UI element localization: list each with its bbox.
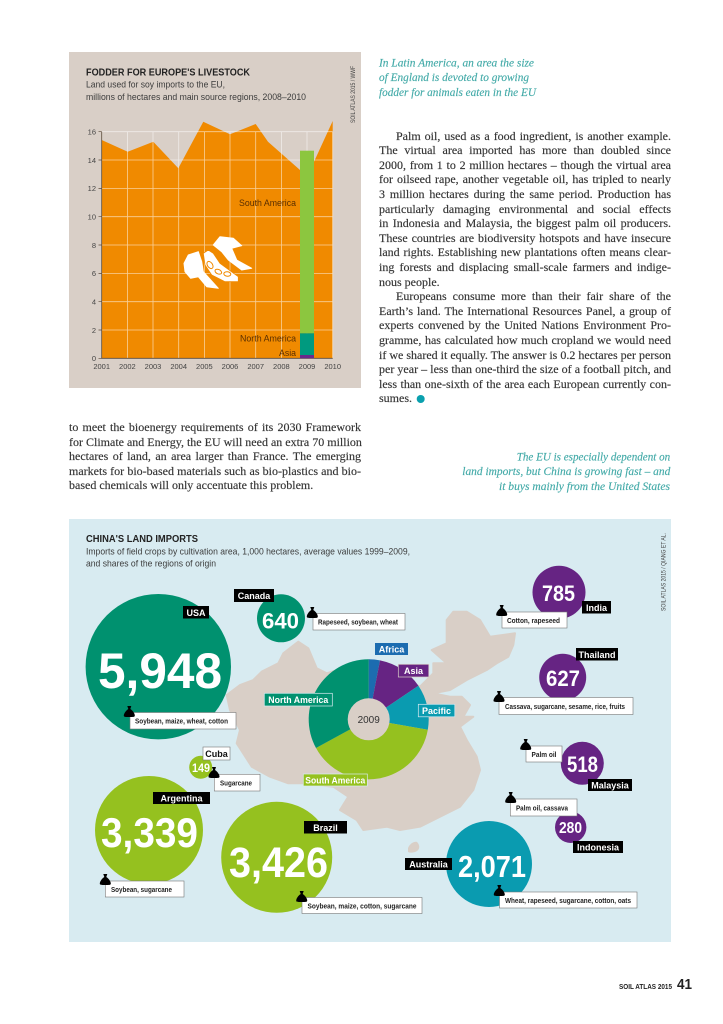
y axis labels: 8 [92, 241, 96, 250]
country: Thailand: 627 [546, 666, 580, 691]
country: Cuba [189, 747, 260, 791]
text block: palm oil and fair share: ing forests and displacing small-scale farmers and indige- [379, 260, 671, 274]
country: Canada: Canada [238, 591, 271, 601]
region labels: South America [239, 198, 297, 209]
caption: Latin America [378, 58, 537, 99]
text block: bioenergy requirements: markets for bio-based materials such as bio-plastics and bio- [69, 464, 361, 478]
donut chart: shares of regions 2009: 2009 [358, 715, 380, 726]
donut labels: South America [305, 776, 366, 786]
donut labels: Pacific [422, 706, 451, 716]
region labels: North America [240, 334, 297, 344]
country: USA: Soybean, maize, wheat, cotton [135, 716, 228, 726]
text block: bioenergy requirements: to meet the bioenergy requirements of its 2030 Framework [69, 420, 361, 434]
text block: bioenergy requirements: based chemicals will only accentuate this problem. [69, 478, 313, 492]
country: Malaysia: 518 [567, 752, 598, 777]
country: Malaysia [520, 739, 632, 791]
donut labels: Asia [404, 666, 424, 676]
text block: palm oil and fair share: gramme, has calculated how much cropland we would need [379, 333, 671, 347]
text block: palm oil and fair share: The virtual area imported has more than doubled since [379, 143, 671, 157]
x axis labels: 2008 [273, 362, 290, 371]
y axis labels: 10 [88, 212, 96, 222]
region labels: Asia [279, 348, 297, 359]
caption: Latin America: of England is devoted to growing [379, 72, 529, 84]
country: USA: USA [186, 608, 206, 618]
text block: bioenergy requirements: hectares of land, an area larger than France. The emerging [69, 449, 361, 463]
x axis labels: 2003 [145, 362, 161, 371]
country: Australia: Wheat, rapeseed, sugarcane, cotton, oats [505, 896, 631, 905]
text block: palm oil and fair share: nous people. [379, 275, 440, 289]
country: India: 785 [542, 581, 575, 606]
country: Australia [405, 821, 637, 908]
end mark dot [417, 395, 425, 403]
country: Canada [234, 589, 405, 642]
text block: palm oil and fair share: for oilseed rape, another vegetable oil, has tripled to nearly [379, 172, 671, 186]
text block: palm oil and fair share: per year – less than one-third the size of a football pitch, and [379, 362, 671, 376]
text block: palm oil and fair share: Europeans consume more than their fair share of the [396, 289, 671, 303]
map: China [227, 612, 515, 830]
y axis labels: 0 [92, 354, 96, 363]
donut labels: North America [268, 695, 329, 705]
text block: palm oil and fair share: sumes. [379, 391, 412, 405]
x axis labels: 2002 [119, 362, 136, 371]
footer: SOIL ATLAS 2015 [619, 982, 672, 991]
country: Indonesia: Palm oil, cassava [516, 804, 569, 812]
country: USA [86, 594, 236, 739]
country: Indonesia: 280 [559, 820, 582, 837]
country: Malaysia: Malaysia [591, 780, 630, 790]
y axis labels: 4 [92, 298, 96, 306]
chart subtitle [86, 80, 306, 103]
chart title: FODDER FOR EUROPE'S LIVESTOCK [86, 66, 250, 78]
text block: palm oil and fair share: 3 million hectares during the same period. Production has [379, 187, 671, 201]
country: USA: 5,948 [98, 643, 222, 699]
panel title: CHINA'S LAND IMPORTS [86, 533, 198, 545]
x axis labels [93, 362, 341, 371]
area chart: soy land imports [98, 121, 333, 358]
y axis labels: 6 [92, 269, 96, 278]
chart subtitle: Land used for soy imports to the EU, [86, 80, 225, 90]
country: Malaysia: Palm oil [532, 750, 556, 759]
x axis labels: 2001 [93, 362, 110, 371]
text block: palm oil and fair share: experts convened by the United Nations Environment Pro- [379, 318, 671, 332]
text block: bioenergy requirements [68, 420, 362, 492]
footer [619, 976, 692, 993]
text block: palm oil and fair share [379, 129, 672, 405]
caption: EU dependence: land imports, but China is growing fast – and [462, 466, 671, 478]
donut labels [264, 643, 455, 786]
y axis labels: 16 [88, 128, 96, 136]
caption: EU dependence: The EU is especially dependent on [517, 452, 670, 464]
map: Hainan [408, 842, 419, 853]
caption: Latin America: fodder for animals eaten in the EU [379, 87, 537, 99]
caption: EU dependence: it buys mainly from the United States [499, 481, 671, 493]
y axis labels [88, 128, 96, 363]
text block: palm oil and fair share: Earth’s land. The International Resources Panel, a group of [379, 304, 671, 318]
text block: palm oil and fair share: if we shared it equally. The answer is 0.2 hectares per person [379, 348, 671, 362]
y axis labels: 12 [88, 184, 96, 193]
panel: China's land imports [69, 519, 671, 942]
x axis labels: 2005 [196, 362, 213, 371]
country: Brazil: Soybean, maize, cotton, sugarcane [308, 902, 416, 910]
country: Brazil: Brazil [313, 823, 338, 833]
country: India: India [586, 603, 608, 613]
country: Thailand [494, 648, 633, 714]
panel subtitle: Imports of field crops by cultivation area, 1,000 hectares, average values 1999–2009, [86, 546, 410, 558]
y axis labels: 2 [92, 326, 96, 335]
country: Argentina [95, 776, 210, 897]
x axis labels: 2009 [299, 362, 315, 371]
footer: 41 [677, 976, 692, 993]
country: Cuba: 149 [192, 761, 210, 775]
x axis labels: 2004 [170, 362, 187, 371]
text block: bioenergy requirements: for Climate and Energy, the EU will need an extra 70 million [69, 435, 362, 449]
country: Indonesia: Indonesia [577, 842, 620, 852]
panel subtitle [86, 546, 410, 570]
source credit: SOIL ATLAS 2015 / WWF [351, 66, 357, 123]
x axis labels: 2010 [324, 362, 341, 371]
country: Indonesia [505, 792, 623, 853]
text block: palm oil and fair share: less than one-sixth of the area each European currently con- [379, 377, 671, 391]
country: Brazil [221, 802, 422, 914]
x axis labels: 2007 [247, 362, 264, 371]
icon: soybean pods [184, 237, 252, 288]
country: India: Cotton, rapeseed [507, 616, 560, 625]
text block: palm oil and fair share: particularly damaging environmental and social effects [379, 202, 671, 216]
caption: Latin America: In Latin America, an area the size [378, 58, 534, 70]
x axis labels: 2006 [222, 362, 238, 371]
caption: EU dependence [462, 452, 671, 493]
bar: 2009 source regions [300, 151, 314, 358]
country: Australia: 2,071 [458, 849, 526, 884]
y axis labels: 14 [88, 156, 96, 165]
country: Brazil: 3,426 [229, 839, 328, 887]
text block: palm oil and fair share: These countries are biodiversity hotspots and have insecure [379, 231, 671, 245]
country: Canada: Rapeseed, soybean, wheat [318, 618, 398, 626]
panel: fodder for Europe's livestock [69, 52, 361, 388]
country: Cuba: Sugarcane [220, 778, 252, 788]
country: Argentina: Argentina [160, 794, 203, 804]
country: Argentina: Soybean, sugarcane [111, 885, 172, 894]
donut labels: Africa [379, 644, 405, 654]
text block: palm oil and fair share: Palm oil, used as a food ingredient, is another example. [396, 129, 671, 143]
country: Australia: Australia [409, 860, 449, 870]
text block: palm oil and fair share: 2000, from 1 to 2 million hectares – though the virtual area [379, 158, 671, 172]
country: Cuba: Cuba [205, 749, 229, 759]
country: India [496, 566, 611, 628]
chart subtitle: millions of hectares and main source regions, 2008–2010 [86, 92, 306, 103]
country: Canada: 640 [262, 608, 299, 634]
country: Argentina: 3,339 [101, 809, 198, 856]
text block: palm oil and fair share: land rights. Establishing new plantations often means clear- [379, 245, 671, 259]
country: Thailand: Thailand [578, 650, 616, 660]
text block: palm oil and fair share: in Indonesia and Malaysia, the biggest palm oil producers. [379, 216, 671, 230]
panel subtitle: and shares of the regions of origin [86, 558, 216, 570]
region labels [239, 198, 297, 359]
source credit: SOIL ATLAS 2015 / QIANG ET AL. [662, 533, 668, 611]
donut chart: shares of regions 2009 [309, 659, 429, 779]
country: Thailand: Cassava, sugarcane, sesame, rice, fruits [505, 702, 625, 711]
